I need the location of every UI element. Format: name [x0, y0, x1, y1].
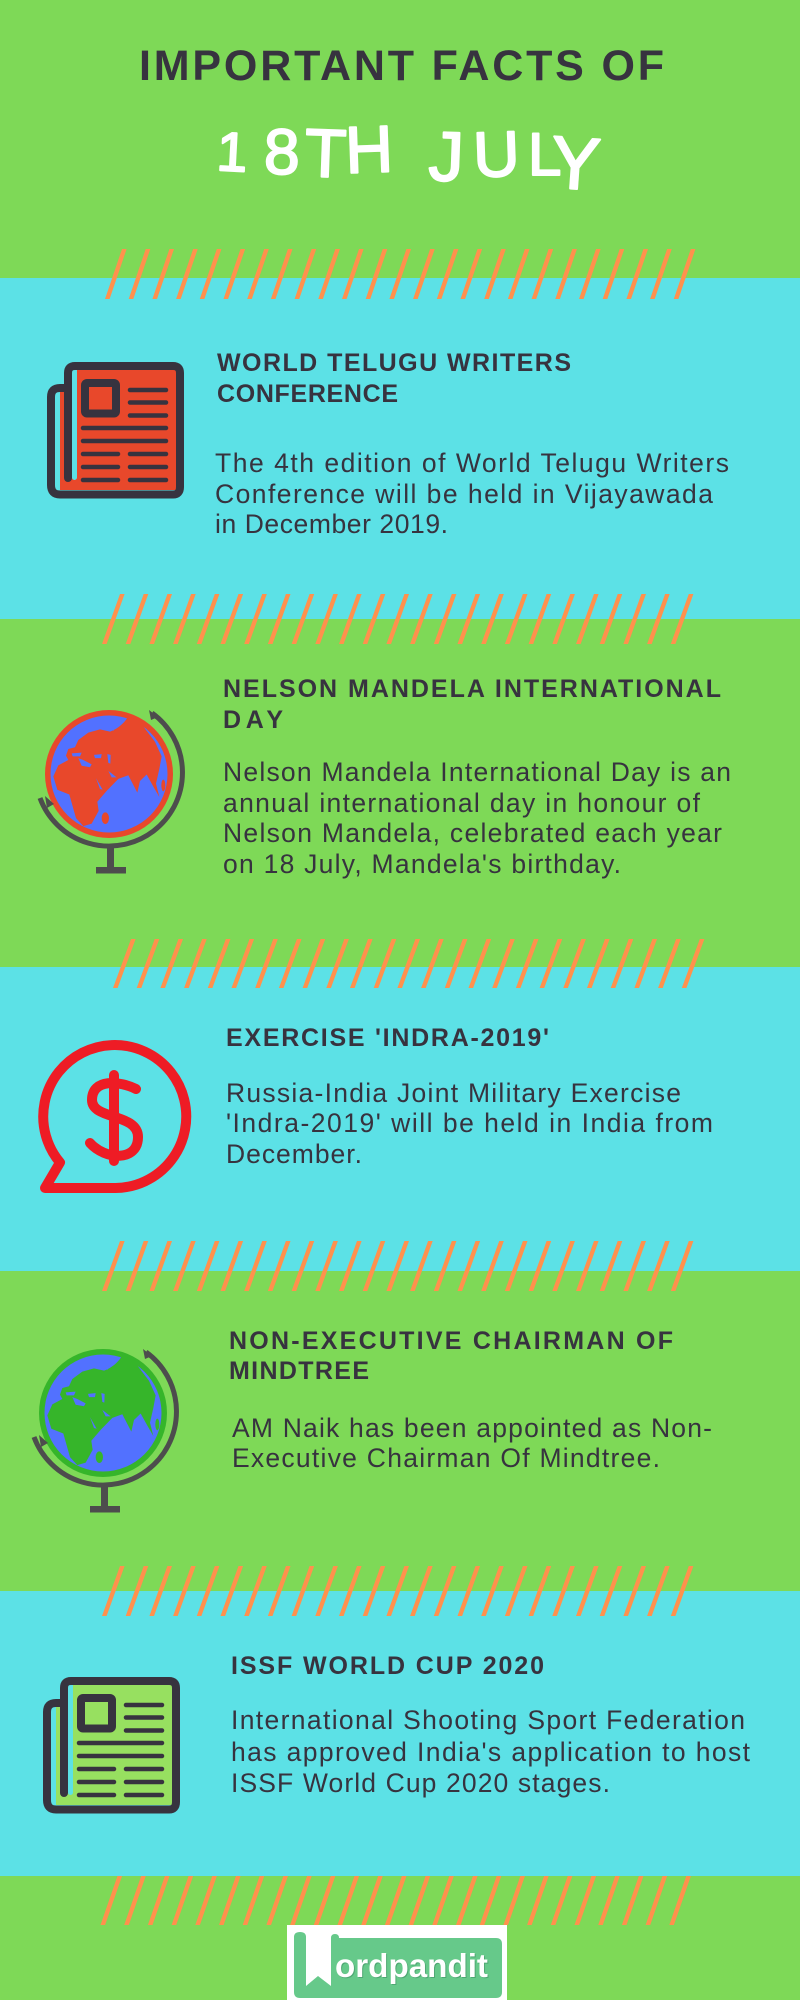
text block: World Telugu Writers Conference: Conference will be held in Vijayawada [215, 479, 713, 509]
text block: ISSF World Cup 2020: ISSF World Cup 2020 stages. [231, 1768, 610, 1798]
panel: ISSF World Cup 2020 [47, 1652, 751, 1810]
text block: Exercise Indra-2019: Russia-India Joint Military Exercise [226, 1078, 681, 1108]
heading: ISSF World Cup 2020: ISSF WORLD CUP 2020 [231, 1652, 544, 1680]
title: 18th July handwritten date: L [528, 121, 561, 188]
text block: Non-Executive Chairman of Mindtree: AM Naik has been appointed as Non- [232, 1413, 712, 1443]
icon: red newspaper [51, 366, 180, 494]
icon: green newspaper [47, 1681, 176, 1810]
heading: Non-Executive Chairman of Mindtree [229, 1327, 673, 1385]
text block: Non-Executive Chairman of Mindtree [232, 1413, 712, 1473]
logo: Wordpandit [287, 1925, 507, 2000]
text block: ISSF World Cup 2020: has approved India's application to host [231, 1737, 751, 1767]
icon: red and blue globe [40, 710, 182, 874]
title: 18th July handwritten date: T [303, 115, 348, 192]
heading: World Telugu Writers Conference: CONFERENCE [217, 380, 398, 408]
heading: World Telugu Writers Conference: WORLD TELUGU WRITERS [217, 349, 571, 377]
text block: ISSF World Cup 2020: International Shooting Sport Federation [231, 1705, 745, 1735]
text block: ISSF World Cup 2020 [231, 1705, 751, 1798]
panel: Nelson Mandela International Day [40, 675, 731, 879]
text block: Nelson Mandela International Day: on 18 July, Mandela's birthday. [223, 849, 621, 879]
heading: Nelson Mandela International Day: DAY [223, 706, 283, 734]
title: 18th July handwritten date: J [427, 117, 465, 196]
logo wordmark: ordpandit [335, 1947, 488, 1984]
text block: Nelson Mandela International Day: Nelson Mandela, celebrated each year [223, 818, 722, 848]
title: 18th July handwritten date: H [344, 111, 394, 187]
icon: green and blue globe [34, 1349, 176, 1512]
text block: Nelson Mandela International Day: annual international day in honour of [223, 788, 701, 818]
title: 18th July handwritten date: Y [548, 120, 603, 206]
icon: dollar speech bubble [43, 1045, 186, 1188]
heading: Nelson Mandela International Day: NELSON MANDELA INTERNATIONAL [223, 675, 721, 703]
title: 18th July handwritten date: U [472, 117, 521, 191]
heading: Non-Executive Chairman of Mindtree: MINDTREE [229, 1357, 369, 1385]
heading: World Telugu Writers Conference [217, 349, 571, 408]
text block: Nelson Mandela International Day: Nelson Mandela International Day is an [223, 757, 731, 787]
text block: Non-Executive Chairman of Mindtree: Executive Chairman Of Mindtree. [232, 1443, 660, 1473]
text block: Exercise Indra-2019: 'Indra-2019' will be held in India from [226, 1108, 713, 1138]
text block: Exercise Indra-2019: December. [226, 1139, 362, 1169]
panel: Non-Executive Chairman of Mindtree [34, 1327, 712, 1512]
title: Important Facts Of: IMPORTANT FACTS OF [139, 42, 664, 90]
panel: Exercise Indra-2019 [43, 1024, 713, 1188]
title: 18th July handwritten date: 8 [264, 116, 300, 188]
text block: Nelson Mandela International Day [223, 757, 731, 879]
title: 18th July handwritten date: 1 [215, 120, 249, 184]
heading: Exercise Indra-2019: EXERCISE 'INDRA-2019' [226, 1024, 549, 1052]
heading: Non-Executive Chairman of Mindtree: NON-EXECUTIVE CHAIRMAN OF [229, 1327, 673, 1355]
text block: Exercise Indra-2019 [226, 1078, 713, 1169]
text block: World Telugu Writers Conference: The 4th edition of World Telugu Writers [215, 448, 729, 478]
text block: World Telugu Writers Conference: in December 2019. [215, 509, 448, 539]
panel: World Telugu Writers Conference [51, 349, 729, 539]
text block: World Telugu Writers Conference [215, 448, 729, 539]
heading: Nelson Mandela International Day [223, 675, 721, 734]
